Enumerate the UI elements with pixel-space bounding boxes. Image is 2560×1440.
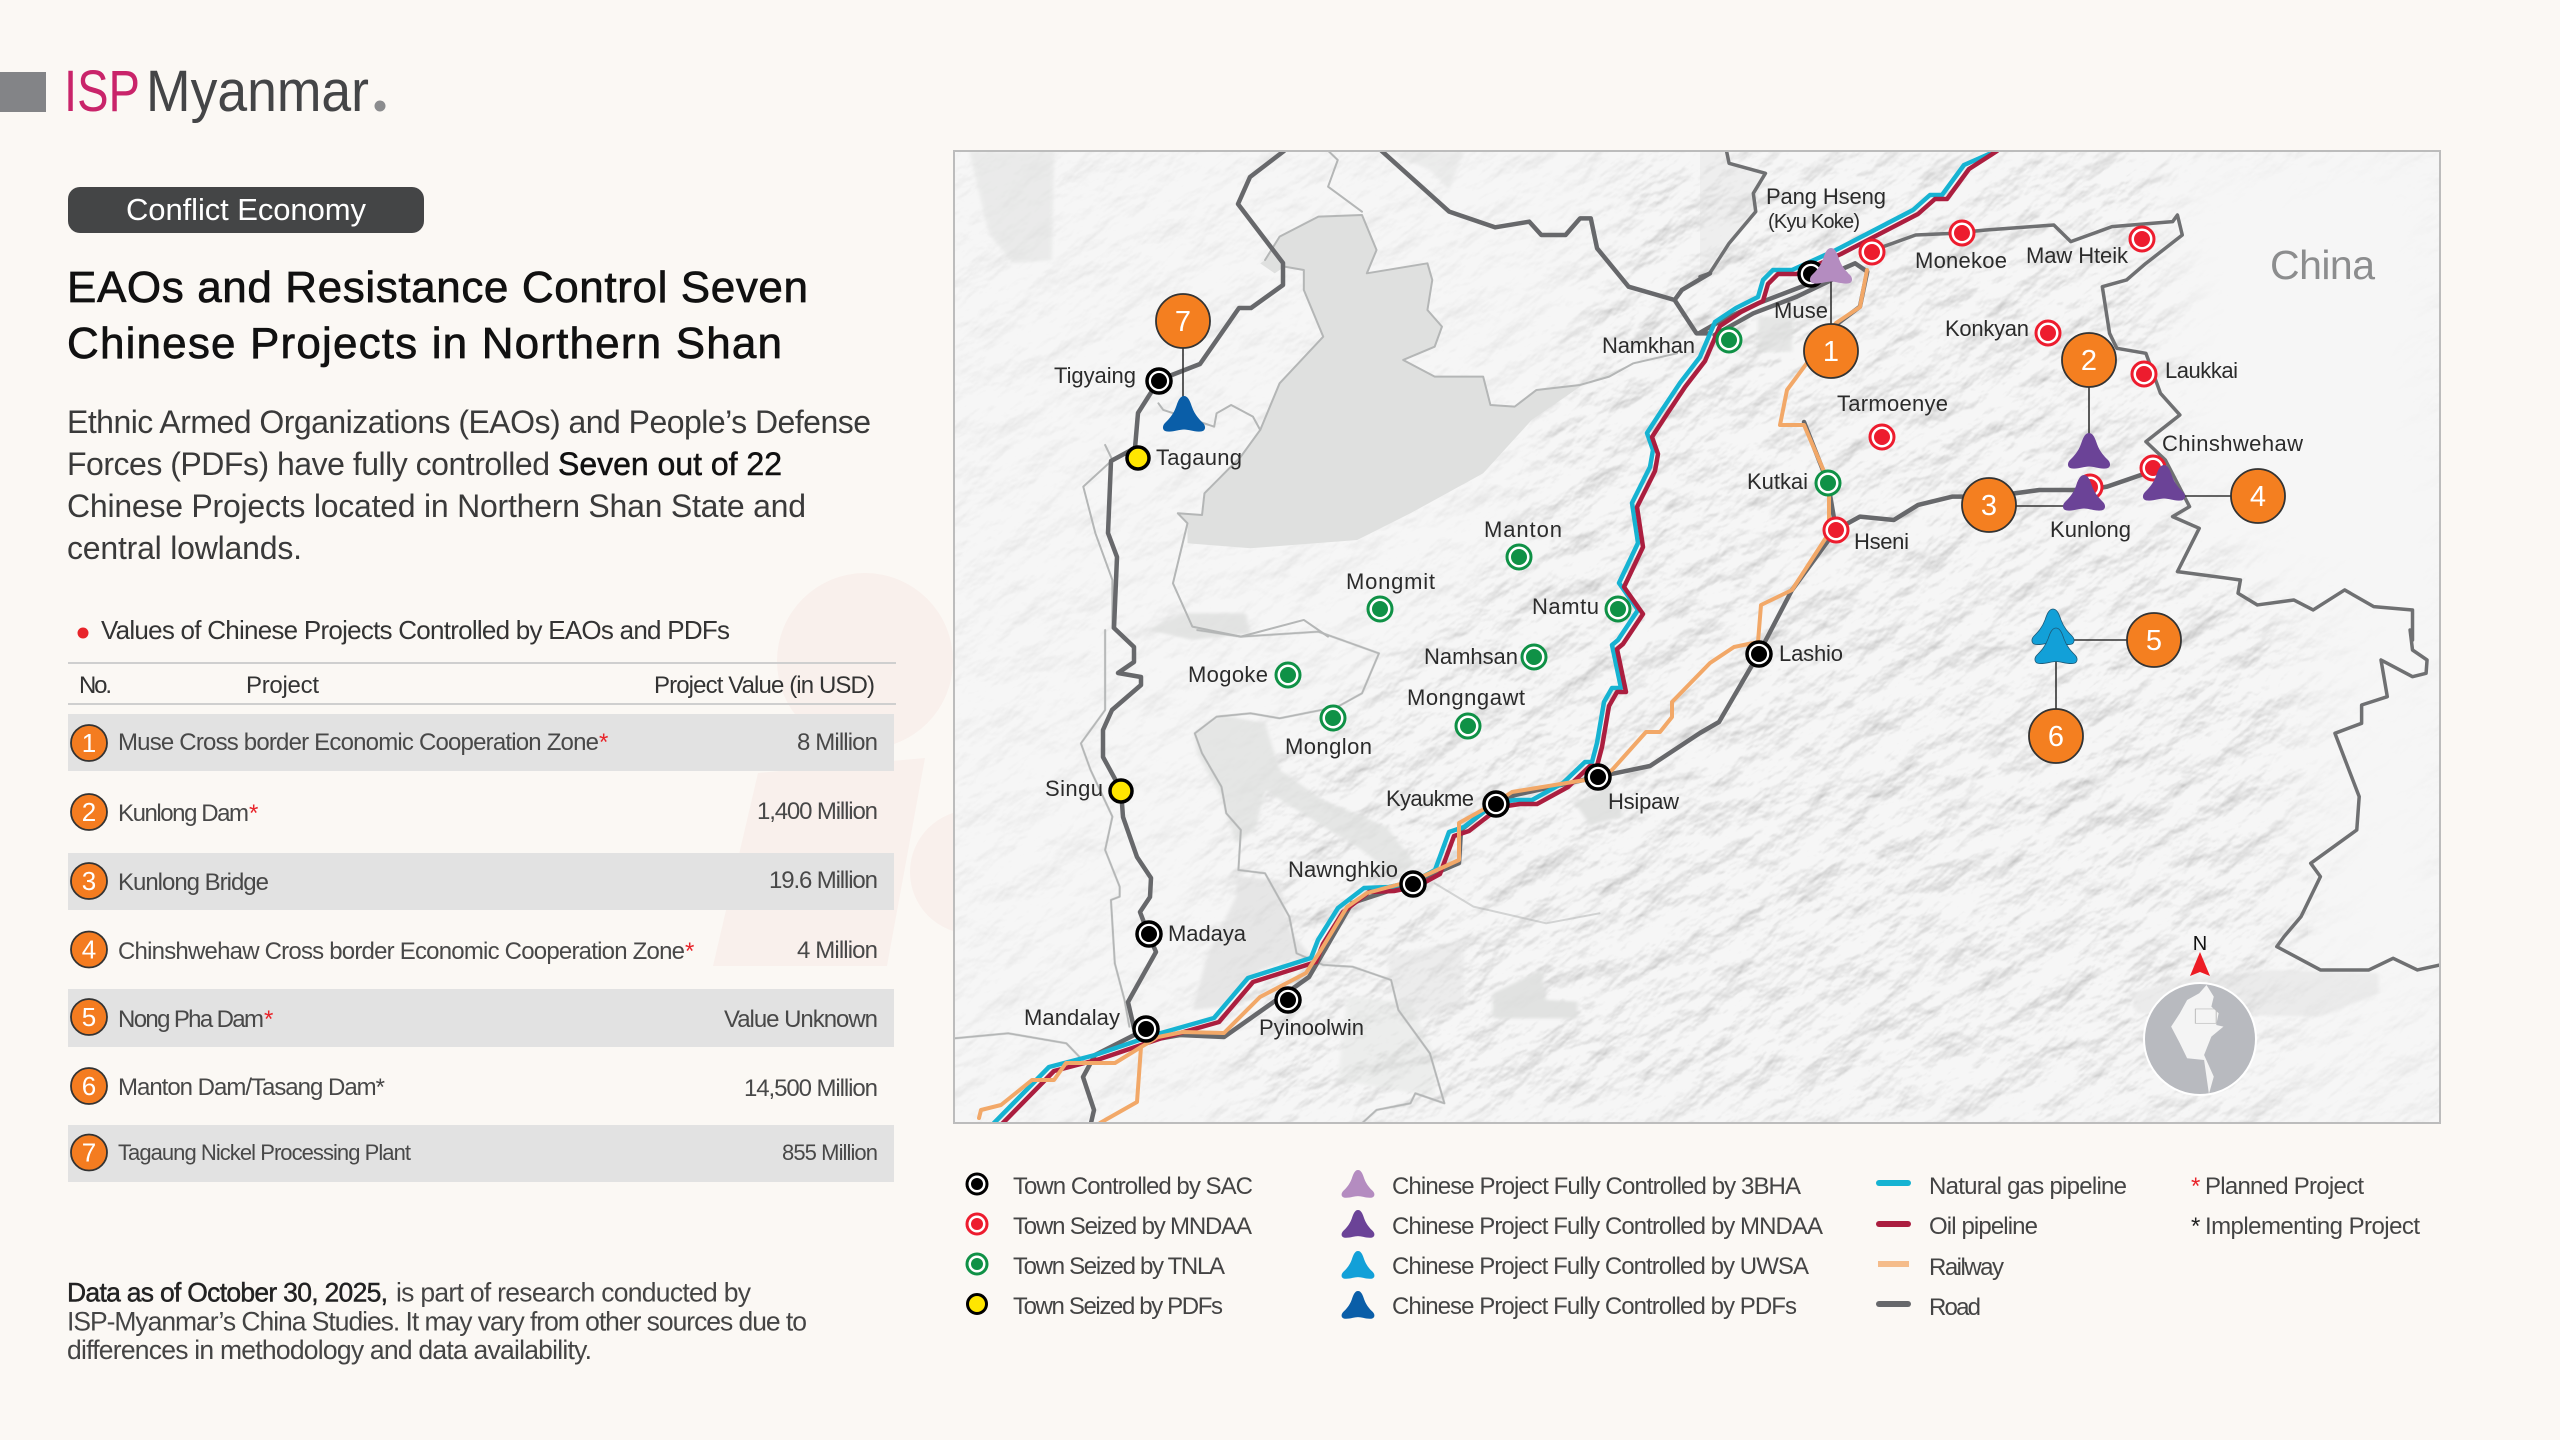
north arrow [2190, 933, 2210, 976]
intro paragraph [67, 404, 871, 566]
town: Singu [1045, 776, 1132, 802]
railway [979, 270, 1867, 1123]
row 5: Value Unknown [724, 1006, 878, 1033]
town: Hsipaw: Hsipaw [1608, 789, 1679, 814]
table header: No. [79, 672, 112, 699]
town: Monglon: Monglon [1285, 734, 1372, 759]
footnote: ISP-Myanmar’s China Studies. It may vary from other sources due to [67, 1306, 807, 1336]
town: Maw Hteik [2026, 227, 2154, 268]
footnote: is part of research conducted by [396, 1278, 752, 1308]
town: Monglon [1285, 706, 1372, 759]
town: Laukkai [2132, 358, 2238, 386]
locator globe [2144, 983, 2256, 1095]
town: Monekoe: Monekoe [1915, 248, 2007, 273]
footnote [67, 1278, 807, 1365]
town: Madaya: Madaya [1168, 921, 1247, 946]
town: Pang Hseng [1766, 184, 1886, 264]
row 4: 4 [82, 934, 96, 964]
project 7 callout [1156, 294, 1210, 432]
projects 5 and 6 callouts: 5 [2146, 625, 2162, 657]
project 2 callout [2062, 333, 2116, 469]
row 1: * [599, 729, 608, 756]
town: Kutkai: Kutkai [1747, 469, 1808, 494]
roads [1083, 151, 2146, 1123]
town: Nawnghkio: Nawnghkio [1288, 857, 1398, 882]
row 5 [71, 999, 878, 1035]
row 4 [71, 932, 878, 968]
town: Pyinoolwin [1259, 988, 1364, 1040]
town: Tarmoenye [1837, 391, 1948, 449]
row 2 [71, 794, 878, 830]
map frame [954, 151, 2440, 1123]
town: Lashio [1747, 641, 1843, 666]
town: Pyinoolwin: Pyinoolwin [1259, 1015, 1364, 1040]
town: Hseni [1824, 518, 1909, 554]
town: Namkhan: Namkhan [1602, 333, 1695, 358]
logo wordmark: ISP [64, 59, 140, 124]
logo [0, 59, 386, 124]
natural gas pipeline [994, 151, 1996, 1123]
Railway: Railway [1929, 1254, 2004, 1281]
projects 5 and 6 callouts: 6 [2048, 721, 2064, 753]
town: Mandalay: Mandalay [1024, 1005, 1120, 1030]
Town Seized by MNDAA: Town Seized by MNDAA [1013, 1213, 1252, 1240]
Chinese Project UWSA: Chinese Project Fully Controlled by UWSA [1392, 1253, 1809, 1280]
row 6 [71, 1068, 878, 1104]
Chinese Project PDFs: Chinese Project Fully Controlled by PDFs [1392, 1293, 1797, 1320]
town: Tarmoenye: Tarmoenye [1837, 391, 1948, 416]
row 1: 1 [82, 728, 96, 758]
row 7: 855 Million [782, 1140, 878, 1165]
category pill: Conflict Economy [126, 192, 366, 227]
intro paragraph: central lowlands. [67, 530, 302, 566]
town: Lashio: Lashio [1779, 641, 1843, 666]
projects 5 and 6 callouts [2029, 609, 2181, 763]
Planned Project: Planned Project [2205, 1173, 2364, 1200]
town: Mongmit [1346, 569, 1435, 621]
row 7: 7 [82, 1138, 96, 1168]
town: Mongmit: Mongmit [1346, 569, 1435, 594]
row 4: * [685, 938, 694, 965]
Town Controlled by SAC: Town Controlled by SAC [1013, 1173, 1253, 1200]
row 2: 2 [82, 797, 96, 827]
intro paragraph: Chinese Projects located in Northern Shan State and [67, 488, 806, 524]
Oil pipeline [1876, 1213, 2038, 1240]
Road [1876, 1294, 1981, 1321]
category pill [68, 187, 424, 233]
thin regional boundaries [955, 151, 1677, 1123]
town: Singu: Singu [1045, 776, 1103, 801]
town: Manton: Manton [1484, 517, 1562, 542]
town: Nawnghkio [1288, 857, 1425, 896]
row stripes [68, 714, 894, 1182]
town: Konkyan: Konkyan [1945, 316, 2029, 341]
town: Kunlong: Kunlong [2050, 517, 2131, 542]
Implementing Project: Implementing Project [2205, 1213, 2420, 1240]
footnote: differences in methodology and data availability. [67, 1335, 592, 1365]
town: Mandalay [1024, 1005, 1158, 1041]
row 6: Manton Dam/Tasang Dam* [118, 1074, 385, 1101]
intro paragraph: Seven out of 22 [558, 446, 782, 482]
town: Namkhan [1602, 328, 1741, 358]
row 4: 4 Million [797, 937, 878, 964]
table header: Project [246, 672, 319, 699]
town: Tigyaing: Tigyaing [1054, 363, 1136, 388]
intro paragraph: Forces (PDFs) have fully controlled [67, 446, 550, 482]
row 3: 3 [82, 866, 96, 896]
row 3: 19.6 Million [769, 867, 878, 894]
label: China: China [2270, 242, 2375, 288]
town: Hsipaw [1586, 765, 1679, 814]
Chinese Project MNDAA: Chinese Project Fully Controlled by MNDAA [1392, 1213, 1823, 1240]
row 5: Nong Pha Dam [118, 1006, 264, 1033]
watermark logo shape [713, 573, 1034, 966]
logo wordmark: Myanmar [146, 59, 369, 124]
town: Mogoke: Mogoke [1188, 662, 1268, 687]
Planned Project: * [2191, 1173, 2200, 1200]
logo dot [374, 100, 386, 112]
project 1 callout [1804, 248, 1858, 378]
Town Seized by PDFs: Town Seized by PDFs [1013, 1293, 1223, 1320]
town: Pang Hseng: Pang Hseng [1766, 184, 1886, 209]
table header: Project Value (in USD) [654, 672, 875, 699]
row 2: 1,400 Million [757, 798, 878, 825]
row 7: Tagaung Nickel Processing Plant [118, 1140, 411, 1165]
title: Chinese Projects in Northern Shan [67, 319, 782, 368]
Road: Road [1929, 1294, 1981, 1321]
town: Chinshwehaw: Chinshwehaw [2162, 431, 2303, 456]
town: Muse [1774, 262, 1828, 323]
town: Monekoe [1915, 221, 2007, 273]
town: Namhsan: Namhsan [1424, 644, 1518, 669]
row 2: Kunlong Dam [118, 800, 249, 827]
project 4 callout: 4 [2250, 481, 2266, 513]
town: Laukkai: Laukkai [2165, 358, 2238, 383]
town: Mongngawt: Mongngawt [1407, 685, 1525, 710]
project 3 callout: 3 [1981, 490, 1997, 522]
row 1: 8 Million [797, 729, 878, 756]
title: EAOs and Resistance Control Seven [67, 263, 808, 312]
legend: project status [2191, 1173, 2420, 1240]
legend: towns [967, 1173, 1253, 1320]
town: Chinshwehaw [2141, 431, 2303, 480]
town: Manton [1484, 517, 1562, 569]
row 1 [71, 725, 878, 761]
town: Kunlong [2050, 475, 2131, 542]
town: Kutkai [1747, 469, 1840, 495]
legend: lines [1876, 1173, 2127, 1321]
town: Muse: Muse [1774, 298, 1828, 323]
project 2 callout: 2 [2081, 345, 2097, 377]
town: Mongngawt [1407, 685, 1525, 738]
Railway [1878, 1254, 2004, 1281]
logo wordmark [64, 59, 369, 124]
legend [967, 1170, 2420, 1321]
row 5: * [264, 1006, 273, 1033]
row 4: Chinshwehaw Cross border Economic Cooperation Zone [118, 938, 685, 965]
table heading: Values of Chinese Projects Controlled by EAOs and PDFs [101, 615, 730, 645]
town: Konkyan [1945, 316, 2060, 345]
town: Maw Hteik: Maw Hteik [2026, 243, 2129, 268]
oil pipeline [999, 151, 1997, 1127]
intro paragraph: Ethnic Armed Organizations (EAOs) and People’s Defense [67, 404, 871, 440]
logo grey block [0, 72, 46, 112]
town: Kyaukme [1386, 786, 1508, 816]
north arrow: N [2193, 933, 2207, 955]
row 2: * [249, 800, 258, 827]
town: Pang Hseng: (Kyu Koke) [1768, 211, 1860, 233]
table [68, 663, 896, 1182]
title [67, 263, 808, 368]
project 7 callout: 7 [1175, 306, 1191, 338]
project 3 callout [1962, 475, 2105, 532]
footnote: Data as of October 30, 2025, [67, 1278, 388, 1308]
Chinese Project 3BHA: Chinese Project Fully Controlled by 3BHA [1392, 1173, 1801, 1200]
project 1 callout: 1 [1823, 336, 1839, 368]
map base and terrain [954, 151, 2440, 1127]
shaded lowland patches [969, 152, 2379, 1097]
Oil pipeline: Oil pipeline [1929, 1213, 2038, 1240]
row 1: Muse Cross border Economic Cooperation Zone [118, 729, 599, 756]
project 4 callout [2143, 465, 2285, 523]
town: Tigyaing [1054, 363, 1171, 393]
town: Namtu: Namtu [1532, 594, 1599, 619]
row 3 [71, 863, 878, 899]
Town Seized by TNLA: Town Seized by TNLA [1013, 1253, 1225, 1280]
row 5: 5 [82, 1002, 96, 1032]
row 3: Kunlong Bridge [118, 869, 269, 896]
town: Kyaukme: Kyaukme [1386, 786, 1474, 811]
town: Tagaung: Tagaung [1156, 445, 1242, 470]
Implementing Project: * [2191, 1213, 2200, 1240]
town: Hseni: Hseni [1854, 529, 1909, 554]
row 7 [71, 1134, 878, 1170]
table header [68, 663, 896, 704]
map panel [954, 151, 2440, 1127]
Natural gas pipeline: Natural gas pipeline [1929, 1173, 2127, 1200]
international border [1700, 152, 2440, 970]
legend: projects [1342, 1170, 1823, 1320]
row 6: 6 [82, 1071, 96, 1101]
town: Namtu [1532, 594, 1630, 621]
row 6: 14,500 Million [744, 1075, 878, 1102]
